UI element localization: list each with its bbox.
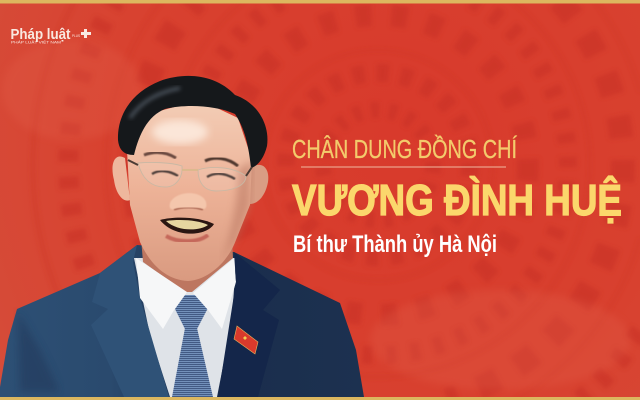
portrait of man in suit: [0, 76, 364, 397]
lapel pin flag: [234, 326, 258, 354]
logo: Pháp luật Plus: PLUS: [72, 33, 80, 38]
eyebrows: [144, 153, 176, 158]
mouth: [160, 218, 214, 234]
face: [127, 100, 252, 281]
glasses: [128, 160, 252, 191]
ears: [112, 157, 130, 201]
neck and chin shadow: [141, 238, 233, 292]
logo: Pháp luật Plus: Pháp luật: [10, 26, 70, 43]
right lapel: [218, 252, 280, 397]
shirt: [134, 258, 236, 397]
eyes: [152, 171, 178, 176]
face right shadow: [222, 160, 252, 262]
left lapel: [91, 245, 169, 397]
logo: Pháp luật Plus: PHÁP LUẬT VIỆT NAM: [11, 40, 62, 44]
bottom gold bar: [0, 397, 640, 400]
subtitle: Bí thư Thành ủy Hà Nội: Bí thư Thành ủy Hà Nội: [293, 231, 497, 258]
forehead highlight: [152, 120, 208, 144]
hair sheen: [130, 88, 180, 118]
top gold bar: [0, 0, 640, 4]
hair: [118, 76, 267, 168]
nose: [170, 193, 206, 209]
divider under headline: [301, 166, 506, 168]
shirt collar: [136, 258, 187, 329]
jacket: [0, 245, 364, 397]
tie: [172, 295, 213, 397]
sleeve fold shadow: [18, 312, 60, 392]
headline: CHÂN DUNG ĐỒNG CHÍ: CHÂN DUNG ĐỒNG CHÍ: [292, 134, 518, 164]
